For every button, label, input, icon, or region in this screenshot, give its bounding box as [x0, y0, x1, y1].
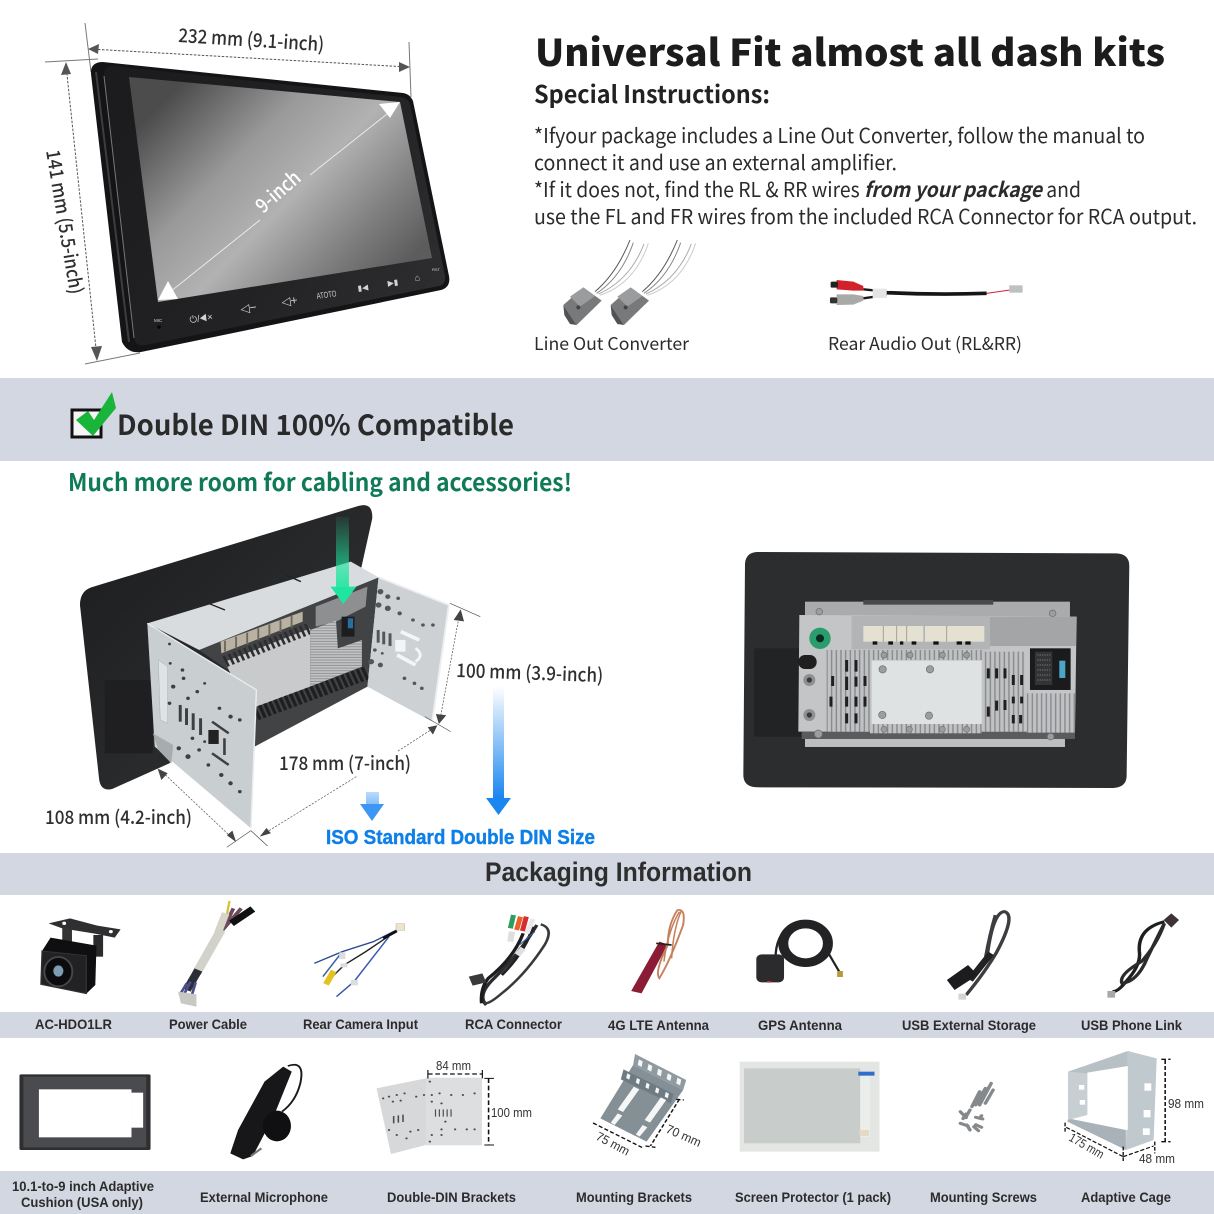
item: screen protector	[735, 1062, 891, 1205]
label: Rear Audio Out (RL&RR)	[828, 331, 1022, 356]
label: Double-DIN Brackets	[387, 1189, 516, 1205]
icon: USB storage cable	[947, 912, 1009, 1000]
item: double-DIN brackets: 100 mm	[491, 1106, 532, 1120]
item: GPS antenna	[756, 924, 843, 1033]
icon: USB phone cable	[1107, 913, 1179, 998]
panel: compatibility heading	[72, 392, 514, 444]
icon: screws	[960, 1083, 993, 1131]
screen	[129, 77, 432, 302]
front buttons: ◁+	[280, 293, 299, 309]
item: line out converter	[534, 240, 696, 356]
label: External Microphone	[200, 1189, 328, 1205]
band: second row labels	[0, 1171, 1214, 1214]
label: Mounting Brackets	[576, 1189, 692, 1205]
icon: microphone	[230, 1065, 301, 1159]
item: adaptive cage	[1065, 1051, 1204, 1205]
label: USB External Storage	[902, 1017, 1036, 1033]
icon: LTE antenna	[631, 910, 684, 993]
front buttons: RST	[432, 267, 441, 272]
instructions text: use the FL and FR wires from the included RCA Connector for RCA output.	[534, 200, 1197, 230]
label: Mounting Screws	[930, 1189, 1037, 1205]
panel: rear photo of unit	[743, 552, 1129, 788]
icon: protector film	[740, 1062, 880, 1152]
icon: metal cage	[1065, 1051, 1171, 1163]
item: adaptive cage: 48 mm	[1139, 1152, 1175, 1166]
label: USB Phone Link	[1081, 1017, 1182, 1033]
item: adaptive cushion	[12, 1074, 154, 1210]
item: power cable	[169, 901, 253, 1032]
band: first row labels	[0, 1012, 1214, 1038]
front buttons: ▶▮	[387, 278, 399, 288]
icon: RCA cable	[830, 280, 1023, 305]
title: Universal Fit almost all dash kits	[535, 23, 1165, 77]
front buttons: ATOTO	[316, 288, 337, 301]
item: rear camera input	[303, 924, 418, 1032]
icon: check box	[72, 392, 116, 437]
band: packaging heading	[0, 853, 1214, 895]
band: compatibility	[0, 378, 1214, 461]
front buttons: ⏻/◀×	[189, 312, 214, 326]
dimension labels: 75 mm	[594, 1129, 632, 1159]
front buttons	[154, 267, 441, 329]
label: GPS Antenna	[758, 1017, 842, 1033]
subheading: more room: Much more room for cabling and accessories!	[68, 463, 572, 498]
item: double-DIN brackets	[377, 1059, 532, 1205]
icon: GPS antenna	[756, 924, 843, 983]
ISO caption: ISO Standard Double DIN Size	[326, 827, 595, 849]
blue arrows	[360, 686, 511, 821]
item: rear audio out	[828, 280, 1023, 356]
label: Line Out Converter	[534, 331, 689, 356]
dimension labels: 98 mm	[1168, 1097, 1204, 1111]
panel: monitor with dimensions	[40, 21, 449, 364]
front buttons: ◁−	[239, 300, 258, 316]
diagonal 9-inch marker: 9-inch	[248, 163, 306, 219]
heading: Double DIN 100% Compatible	[117, 404, 514, 444]
item: mounting brackets: 70 mm	[664, 1122, 703, 1150]
front buttons: ⌂	[414, 272, 421, 283]
label: 10.1-to-9 inch Adaptive	[12, 1178, 154, 1194]
depth labels: 100 mm (3.9-inch)	[456, 656, 604, 688]
icon: L brackets	[593, 1054, 686, 1148]
instructions text	[534, 119, 1197, 230]
subheading: Special Instructions:	[534, 75, 770, 110]
item: adaptive cushion: Cushion (USA only)	[21, 1194, 143, 1210]
unit photo	[80, 505, 449, 828]
label: Power Cable	[169, 1016, 247, 1032]
label: RCA Connector	[465, 1016, 563, 1032]
panel: cage photo with dimensions	[45, 505, 604, 849]
label: Adaptive Cage	[1081, 1189, 1171, 1205]
icon: power cable	[178, 901, 253, 1007]
label: Screen Protector (1 pack)	[735, 1189, 891, 1205]
label: 4G LTE Antenna	[608, 1017, 709, 1033]
dimension lines	[45, 23, 411, 364]
instructions text: *If it does not, find the RL & RR wires from your package and	[534, 173, 1081, 203]
front buttons: MIC	[154, 318, 163, 323]
instructions text: connect it and use an external amplifier.	[534, 146, 897, 176]
width label: 232 mm (9.1-inch)	[178, 21, 325, 57]
item: camera	[35, 918, 121, 1032]
instructions text: *Ifyour package includes a Line Out Converter, follow the manual to	[534, 119, 1145, 149]
icon: bracket plates	[377, 1070, 494, 1154]
panel: special instructions	[534, 23, 1197, 356]
panel: cage photo with dimensions: 178 mm (7-inch)	[279, 749, 411, 776]
green arrow drawn on the unit	[336, 517, 349, 587]
monitor body	[91, 62, 449, 352]
dimension labels: 84 mm	[436, 1059, 471, 1073]
icon: line out converters	[563, 240, 696, 325]
item: adaptive cage: 175 mm	[1066, 1130, 1106, 1162]
label: Rear Camera Input	[303, 1016, 418, 1032]
item: mounting screws	[930, 1083, 1037, 1205]
front buttons: ▮◀	[357, 282, 370, 293]
item: USB external storage	[902, 912, 1036, 1033]
icon: adaptive cushion frame	[19, 1074, 151, 1150]
panel: cage photo with dimensions: 108 mm (4.2-inch)	[45, 803, 192, 830]
height label: 141 mm (5.5-inch)	[40, 148, 91, 296]
icon: rear camera	[41, 918, 121, 994]
section heading: packaging information: Packaging Information	[485, 857, 752, 887]
item: 4G LTE antenna	[608, 910, 709, 1033]
icon: rear camera wires	[314, 924, 405, 997]
label: AC-HDO1LR	[35, 1016, 112, 1032]
icon: RCA harness	[469, 915, 549, 1005]
diagonal 9-inch marker	[158, 102, 400, 300]
item: USB phone link	[1081, 913, 1182, 1033]
dimension lines	[158, 603, 480, 847]
item: external microphone	[200, 1065, 328, 1205]
item: mounting brackets	[576, 1054, 703, 1205]
item: RCA connector	[465, 915, 563, 1032]
